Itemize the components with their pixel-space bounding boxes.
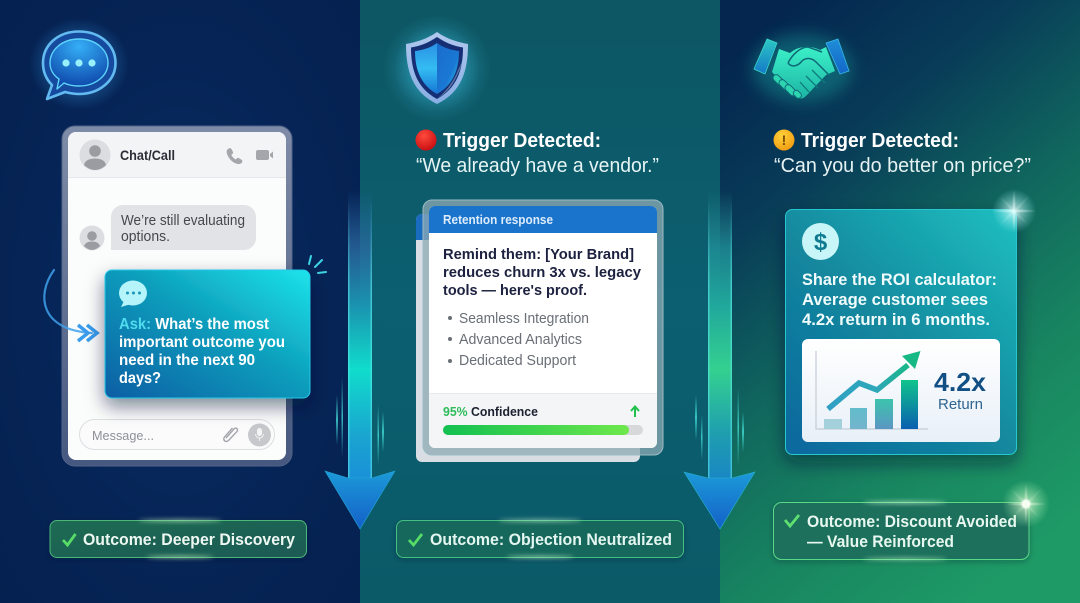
icon: shield — [383, 14, 491, 122]
icon: spark lines — [309, 256, 326, 273]
chart: return growth: 4.2x — [934, 367, 987, 397]
callout: outcome discount avoided: — Value Reinforced — [807, 533, 954, 551]
card headline — [443, 246, 642, 299]
feature list: Dedicated Support — [459, 353, 576, 369]
heading: trigger detected price — [774, 130, 1031, 177]
icon: dollar coin: $ — [814, 229, 828, 256]
callout: outcome discount avoided — [774, 502, 1029, 560]
panel: phone mockup — [62, 126, 292, 466]
icon: dollar coin — [802, 223, 839, 260]
heading: trigger detected price: Trigger Detected: — [801, 130, 959, 152]
icon: outcome sparkle — [1002, 480, 1050, 528]
ROI text — [802, 271, 997, 329]
panel: right column background — [720, 0, 1080, 603]
panel: left column background — [0, 0, 360, 603]
card header: Retention response — [443, 212, 553, 227]
ROI text: Average customer sees — [802, 291, 988, 309]
panel: middle column background — [360, 0, 720, 603]
icon: card sparkle — [992, 189, 1036, 233]
panel: ask prompt card: need in the next 90 — [119, 352, 255, 369]
icon: handshake — [752, 34, 852, 102]
icon: curved arrow into prompt — [44, 270, 97, 341]
card headline: reduces churn 3x vs. legacy — [443, 264, 642, 281]
message input: Message... — [92, 428, 154, 443]
callout: outcome deeper discovery — [50, 520, 306, 558]
callout: outcome deeper discovery: Outcome: Deeper Discovery — [83, 531, 296, 549]
confidence meter: 95% Confidence — [443, 404, 538, 419]
panel: ask prompt card: days? — [119, 370, 161, 387]
callout: outcome objection neutralized: Outcome: Objection Neutralized — [430, 531, 672, 549]
customer message bubble: We’re still evaluating — [121, 213, 245, 229]
message input — [80, 420, 274, 450]
heading: trigger detected vendor: Trigger Detected: — [443, 130, 601, 152]
panel: ROI card — [786, 210, 1016, 454]
callout: outcome objection neutralized — [396, 520, 684, 558]
panel: ask prompt card: important outcome you — [119, 334, 285, 351]
panel: ask prompt card: Ask: What’s the most — [119, 316, 269, 333]
panel: retention response card — [416, 200, 663, 462]
card headline: tools — here's proof. — [443, 282, 587, 299]
heading: trigger detected vendor — [416, 130, 659, 177]
confidence meter — [429, 393, 657, 448]
chat header: Chat/Call — [120, 148, 175, 163]
ROI text: 4.2x return in 6 months. — [802, 311, 990, 329]
chart: return growth — [802, 339, 1000, 442]
heading: trigger detected vendor: “We already have a vendor.” — [416, 154, 659, 177]
callout: outcome discount avoided: Outcome: Discount Avoided — [807, 513, 1017, 531]
heading: trigger detected price: “Can you do better on price?” — [774, 154, 1031, 177]
customer message bubble — [80, 205, 256, 250]
arrow: first column divider — [325, 190, 395, 529]
icon: prompt bubble — [119, 280, 147, 307]
feature list: Seamless Integration — [459, 311, 589, 327]
card headline: Remind them: [Your Brand] — [443, 246, 634, 263]
card header — [429, 206, 657, 233]
ROI text: Share the ROI calculator: — [802, 271, 997, 289]
chart: return growth: Return — [938, 397, 983, 413]
heading: trigger detected price: ! — [782, 132, 786, 148]
icon: chat bubble — [29, 18, 129, 110]
feature list — [448, 311, 589, 369]
chat header — [68, 132, 286, 178]
feature list: Advanced Analytics — [459, 332, 582, 348]
panel: ask prompt card — [105, 270, 310, 398]
arrow: second column divider — [684, 190, 755, 529]
customer message bubble: options. — [121, 229, 170, 245]
